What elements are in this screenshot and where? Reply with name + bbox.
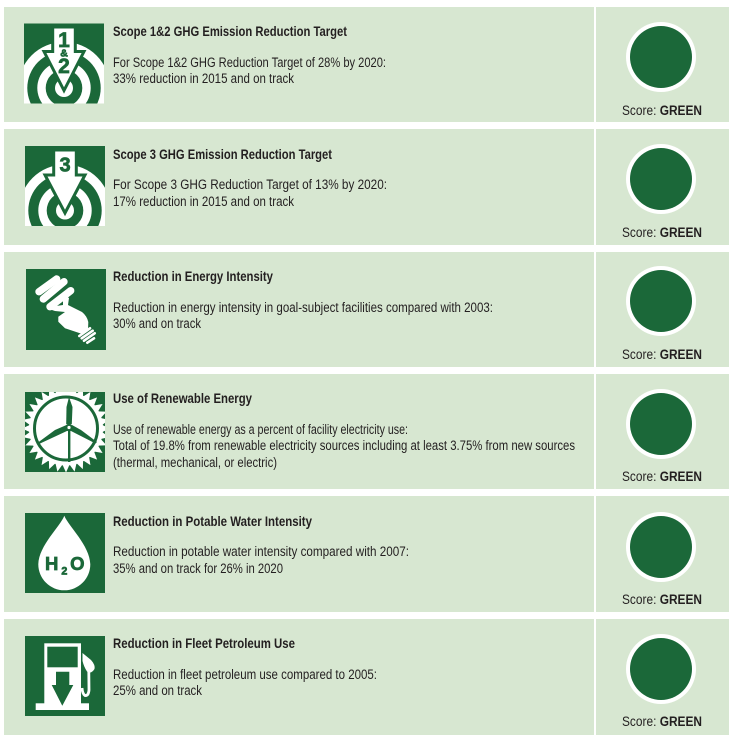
panel: row 3 score <box>596 252 729 367</box>
icon: target with 1&2 arrow: & <box>60 48 68 60</box>
icon: fuel pump <box>25 636 105 716</box>
text block: row 3 <box>113 300 493 331</box>
text block: row 6 <box>113 667 377 698</box>
panel: row 2 background <box>4 129 594 245</box>
text block: row 3: Reduction in energy intensity in goal-subject facilities compared with 2003: <box>113 300 493 315</box>
text block: row 6: 25% and on track <box>113 683 202 698</box>
icon: water drop H2O: O <box>70 553 84 574</box>
icon: water drop H2O: H <box>45 553 58 574</box>
text block: row 6: Reduction in fleet petroleum use compared to 2005: <box>113 667 377 682</box>
panel: row 4 score <box>596 374 729 489</box>
icon: target with 1&2 arrow: 2 <box>58 55 70 78</box>
text block: row 1: 33% reduction in 2015 and on track <box>113 71 294 86</box>
panel: row 5 score: Score: GREEN <box>622 592 702 607</box>
heading: row 5: Reduction in Potable Water Intensity <box>113 514 312 529</box>
icon: water drop H2O <box>25 513 105 593</box>
icon: water drop H2O: 2 <box>61 566 67 578</box>
heading: row 1: Scope 1&2 GHG Emission Reduction Target <box>113 24 347 39</box>
panel: row 3 background <box>4 252 594 367</box>
text block: row 5: 35% and on track for 26% in 2020 <box>113 561 283 576</box>
panel: row 2 score: Score: GREEN <box>622 225 702 240</box>
icon: target with 1&2 arrow: 1 <box>58 29 70 52</box>
text block: row 2: For Scope 3 GHG Reduction Target of 13% by 2020: <box>113 177 387 192</box>
panel: row 6 score: Score: GREEN <box>622 714 702 729</box>
row: fleet petroleum <box>4 619 594 735</box>
text block: row 1: For Scope 1&2 GHG Reduction Target of 28% by 2020: <box>113 55 386 70</box>
heading: row 4: Use of Renewable Energy <box>113 391 252 406</box>
text block: row 4: (thermal, mechanical, or electric) <box>113 455 277 470</box>
panel: row 1 background <box>4 7 594 122</box>
text block: row 4: Total of 19.8% from renewable electricity sources including at least 3.75% from new sources <box>113 438 575 453</box>
heading: row 2: Scope 3 GHG Emission Reduction Target <box>113 147 332 162</box>
panel: row 6 background <box>4 619 594 735</box>
panel: row 2 score <box>596 129 729 245</box>
panel: row 1 score <box>596 7 729 122</box>
row: renewable energy <box>4 374 594 489</box>
text block: row 5: Reduction in potable water intensity compared with 2007: <box>113 544 409 559</box>
text block: row 1 <box>113 55 386 86</box>
row: Scope 1&2 GHG target <box>4 7 594 134</box>
text block: row 2: 17% reduction in 2015 and on track <box>113 194 294 209</box>
row: potable water <box>4 496 594 612</box>
text block: row 5 <box>113 544 409 576</box>
row: Scope 3 GHG target <box>4 129 594 256</box>
panel: row 4 score: Score: GREEN <box>622 469 702 484</box>
icon: target with 1&2 arrow <box>24 24 104 104</box>
panel: row 6 score <box>596 619 729 735</box>
heading: row 6: Reduction in Fleet Petroleum Use <box>113 636 295 651</box>
icon: wind turbine in sun <box>25 392 105 472</box>
icon: light bulb <box>26 269 106 350</box>
panel: row 1 score: Score: GREEN <box>622 103 702 118</box>
panel: row 4 background <box>4 374 594 489</box>
text block: row 4 <box>113 422 575 470</box>
row: energy intensity <box>4 252 594 367</box>
panel: row 5 background <box>4 496 594 612</box>
panel: row 3 score: Score: GREEN <box>622 347 702 362</box>
heading: row 3: Reduction in Energy Intensity <box>113 269 273 284</box>
panel: row 5 score <box>596 496 729 612</box>
text block: row 3: 30% and on track <box>113 316 201 331</box>
icon: target with 3 arrow: 3 <box>59 154 71 176</box>
text block: row 2 <box>113 177 387 209</box>
text block: row 4: Use of renewable energy as a percent of facility electricity use: <box>113 422 408 437</box>
icon: target with 3 arrow <box>25 146 105 226</box>
